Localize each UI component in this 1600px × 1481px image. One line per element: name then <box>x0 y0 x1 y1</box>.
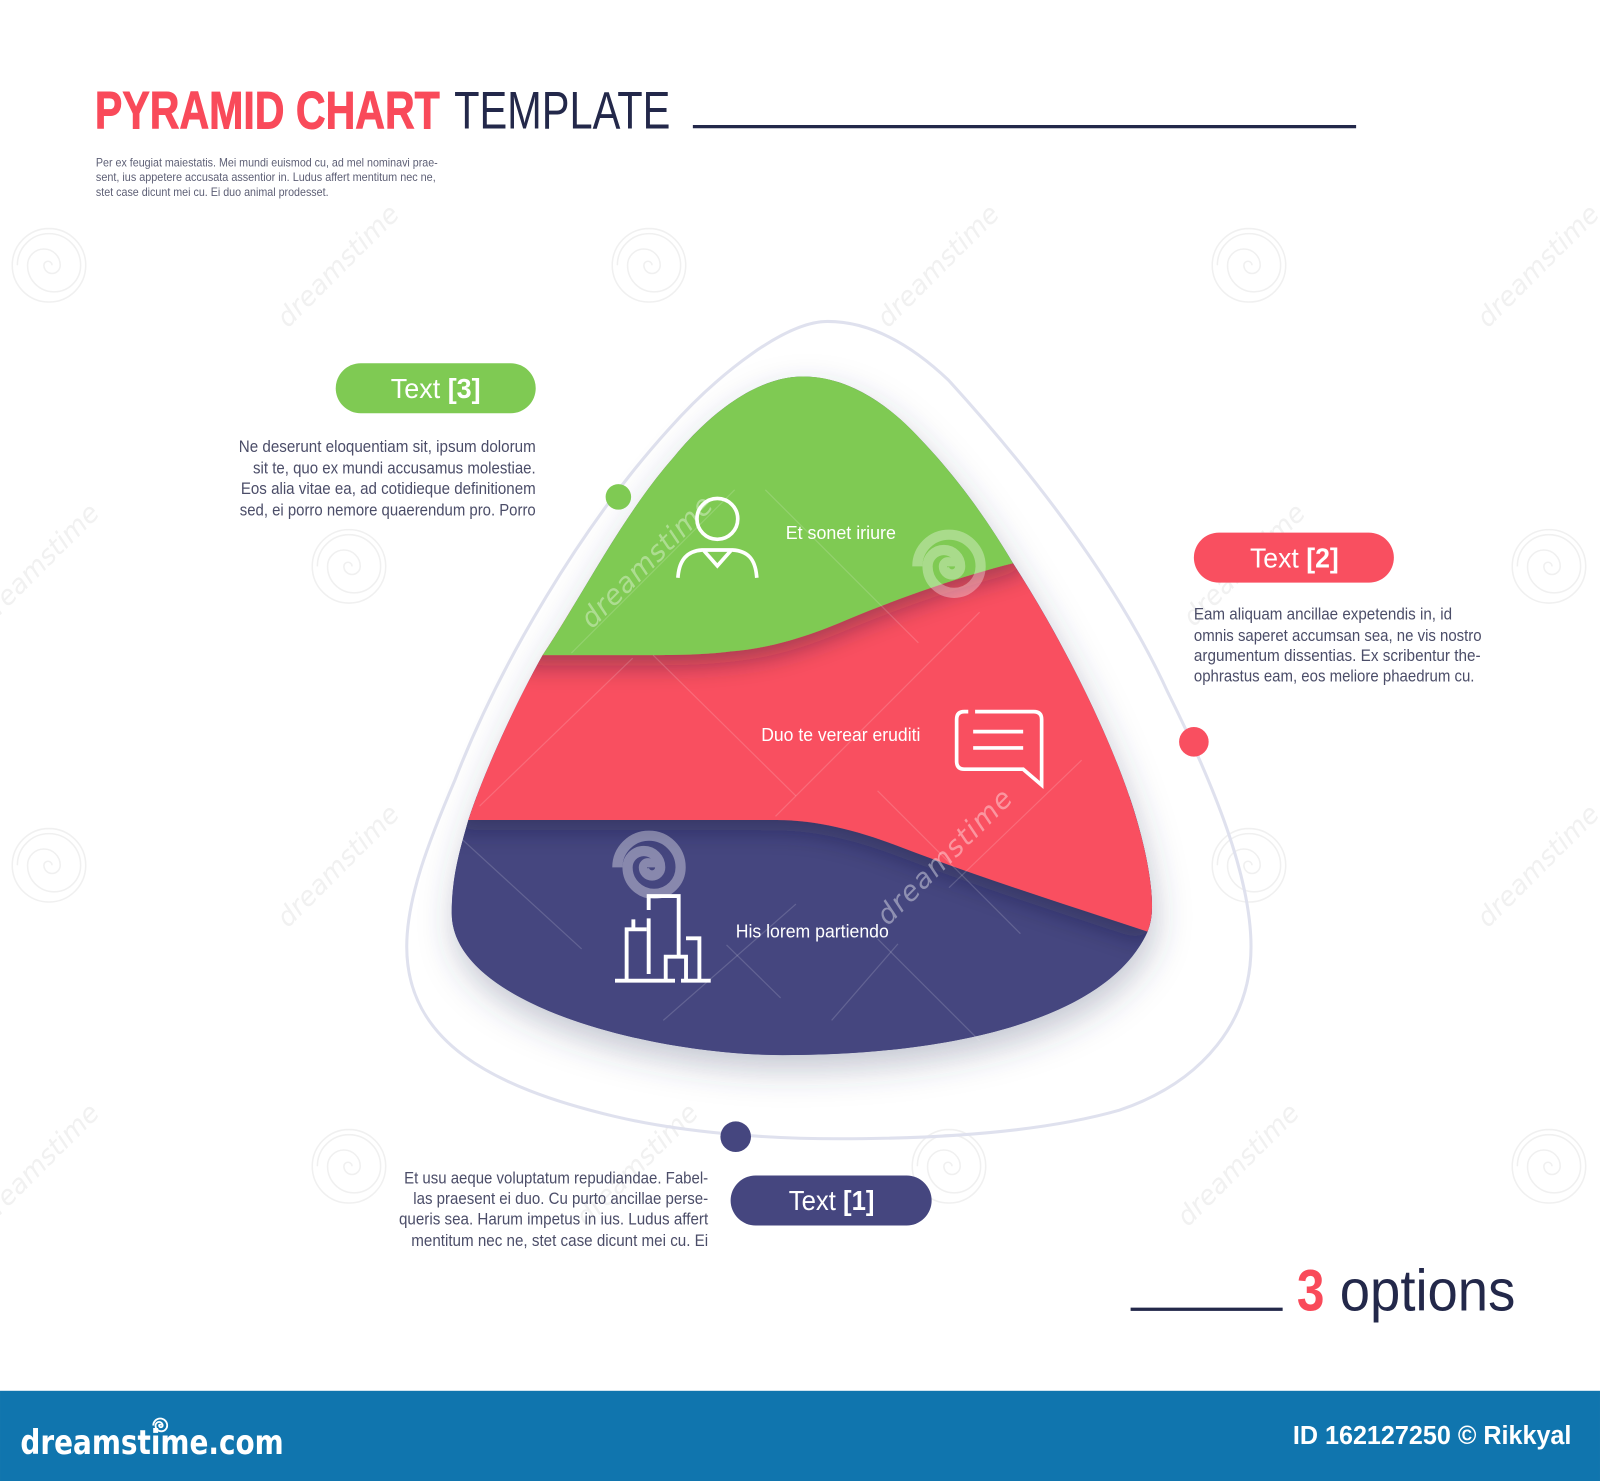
label: Et sonet iriure: Et sonet iriure <box>786 522 896 543</box>
outer ring <box>407 321 1251 1139</box>
callout: Text 2: ophrastus eam, eos meliore phaedrum cu. <box>1194 667 1474 686</box>
callout: Text 2: omnis saperet accumsan sea, ne vis nostro <box>1194 626 1482 645</box>
watermark pattern: dreamstime <box>271 199 406 334</box>
callout: Text 1: las praesent ei duo. Cu purto ancillae perse- <box>413 1189 708 1208</box>
callout: Text 3: Eos alia vitae ea, ad cotidieque definitionem <box>241 479 536 498</box>
icon: city buildings <box>615 896 711 981</box>
segment 1: navy base <box>452 796 1152 1055</box>
callout: Text 3 <box>239 363 536 519</box>
watermark pattern: dreamstime <box>1171 1098 1306 1232</box>
callout: Text 1: Text [1] <box>789 1185 874 1216</box>
intro text: stet case dicunt mei cu. Ei duo animal prodesset. <box>96 186 329 199</box>
callout: Text 1 <box>399 1169 932 1250</box>
segment 3: green top <box>510 357 1031 655</box>
callout: Text 1: Et usu aeque voluptatum repudiandae. Fabel- <box>404 1169 708 1188</box>
callout: Text 1: mentitum nec ne, stet case dicunt mei cu. Ei <box>411 1231 708 1250</box>
footer credit: ID 162127250 © Rikkyal <box>1293 1422 1571 1450</box>
icon: person <box>678 498 757 576</box>
callout: Text 3: Text [3] <box>391 373 481 404</box>
watermark pattern: dreamstime <box>271 799 406 934</box>
label: Duo te verear eruditi: Duo te verear eruditi <box>761 724 920 745</box>
label: His lorem partiendo: His lorem partiendo <box>736 921 889 942</box>
title: PYRAMID CHART <box>95 82 440 141</box>
watermark over chart: dreamstime <box>574 489 719 635</box>
segments clipped to silhouette <box>439 357 1173 1071</box>
intro text: Per ex feugiat maiestatis. Mei mundi euismod cu, ad mel nominavi prae- <box>96 156 438 169</box>
callout: Text 3: Ne deserunt eloquentiam sit, ipsum dolorum <box>239 437 536 456</box>
callout: Text 3: sed, ei porro nemore quaerendum pro. Porro <box>240 500 536 519</box>
callout: Text 3: sit te, quo ex mundi accusamus molestiae. <box>253 458 536 477</box>
watermark over chart <box>459 489 1082 1041</box>
intro text: sent, ius appetere accusata assentior in. Ludus affert mentitum nec ne, <box>96 171 436 184</box>
watermark pattern: dreamstime <box>1177 498 1312 632</box>
callout: Text 1: queris sea. Harum impetus in ius. Ludus affert <box>399 1209 708 1228</box>
marker dot: red <box>1179 727 1209 757</box>
watermark pattern: dreamstime <box>871 199 1006 334</box>
options count: 3 <box>1297 1259 1324 1324</box>
marker dot: green <box>606 484 631 510</box>
chart outer shadow <box>452 377 1152 1055</box>
footer bar <box>0 1391 1600 1481</box>
icon: speech bubble <box>957 712 1042 785</box>
title: TEMPLATE <box>454 82 670 141</box>
title <box>95 82 1356 141</box>
callout: Text 2: Eam aliquam ancillae expetendis in, id <box>1194 604 1452 623</box>
watermark pattern: dreamstime <box>570 1098 705 1232</box>
callout: Text 2: argumentum dissentias. Ex scribentur the- <box>1194 646 1481 665</box>
options count: options <box>1340 1259 1515 1324</box>
marker dot: navy <box>720 1121 751 1152</box>
options count <box>1131 1259 1515 1324</box>
callout: Text 2: Text [2] <box>1250 542 1339 573</box>
watermark over chart: dreamstime <box>870 783 1019 931</box>
callout: Text 2 <box>1194 533 1482 686</box>
footer logo: dreamstime.com <box>20 1423 284 1462</box>
segment 2: red middle <box>449 563 1158 932</box>
watermark pattern <box>0 199 1600 1232</box>
intro text <box>96 156 438 199</box>
pyramid chart <box>439 357 1173 1071</box>
